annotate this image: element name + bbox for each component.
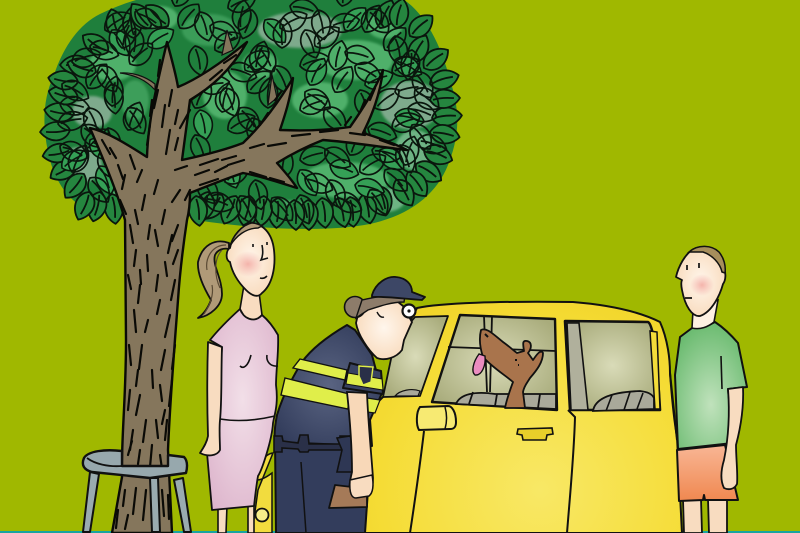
- seat ribs: [469, 392, 540, 408]
- tree canopy: [40, 0, 462, 230]
- ground strip: [0, 531, 800, 533]
- face features: [685, 263, 699, 298]
- trunk shape: [90, 42, 407, 533]
- stool ring: [83, 450, 187, 478]
- glasses: [402, 304, 416, 318]
- ear: [377, 312, 384, 317]
- door edges: [410, 373, 677, 533]
- stool ring inner edge: [87, 458, 122, 466]
- car body: [362, 302, 682, 533]
- dog tongue: [473, 354, 485, 375]
- stool legs: [83, 472, 191, 532]
- neck: [692, 300, 718, 329]
- left arm: [200, 342, 222, 455]
- car rear fender behind woman: [252, 453, 273, 533]
- police officer: [274, 277, 425, 533]
- face features: [253, 242, 268, 278]
- rim leaves: [40, 0, 462, 230]
- hair on head: [230, 223, 262, 246]
- window pillars: [448, 316, 556, 392]
- small twigs: [120, 30, 277, 105]
- green shirt: [675, 322, 747, 449]
- head: [356, 297, 412, 359]
- ponytail: [198, 241, 229, 318]
- dog: [473, 329, 543, 408]
- police cap: [372, 277, 425, 300]
- hair: [356, 295, 405, 318]
- man: [675, 246, 747, 533]
- dress waist and bust: [220, 355, 278, 420]
- rear pillar: [567, 323, 588, 410]
- reflective stripe top: [293, 359, 347, 380]
- hair: [689, 246, 725, 273]
- rear window: [565, 321, 660, 411]
- jacket: [275, 325, 382, 446]
- door handle: [517, 428, 553, 440]
- woman: [198, 223, 278, 533]
- canopy foliage mass: [44, 0, 457, 229]
- wheel nut: [256, 508, 268, 522]
- trousers: [275, 436, 372, 533]
- legs: [218, 504, 254, 533]
- sleeve badge: [359, 366, 373, 385]
- dress: [207, 309, 278, 510]
- inner outline leaves: [56, 0, 450, 227]
- yellow rear strip: [650, 331, 660, 409]
- belt: [274, 435, 353, 452]
- inner filled leaves: [57, 2, 427, 201]
- dashboard mound: [395, 390, 420, 396]
- window glass: [432, 315, 557, 410]
- legs: [683, 499, 727, 533]
- canopy light patches: [58, 6, 440, 220]
- cheek: [233, 251, 263, 277]
- head: [676, 248, 725, 316]
- dog body and snout: [480, 329, 543, 408]
- trouser crease: [301, 462, 306, 533]
- hair bun: [344, 296, 366, 318]
- cheek: [690, 274, 714, 296]
- bark texture: [102, 55, 394, 529]
- sleeve: [343, 363, 383, 394]
- reflective stripe bottom: [281, 378, 349, 409]
- car: [252, 302, 682, 533]
- arm: [721, 387, 743, 489]
- wing mirror: [417, 406, 456, 430]
- holster: [337, 436, 357, 472]
- head: [227, 223, 274, 296]
- sleeve stripe: [346, 373, 383, 390]
- dog eye and spots: [485, 334, 519, 365]
- windscreen: [383, 316, 448, 397]
- door window with dog: [432, 315, 557, 410]
- shorts: [677, 445, 738, 501]
- arm: [347, 392, 373, 498]
- tree trunk and branches: [90, 30, 407, 533]
- hand: [350, 475, 373, 498]
- rear window glass: [565, 321, 660, 410]
- neck: [240, 285, 262, 326]
- wallet: [329, 485, 367, 508]
- rear seat ribs: [606, 392, 643, 411]
- rear seat: [593, 391, 654, 411]
- tree stool guard: [83, 450, 191, 532]
- rear seat in window: [456, 393, 556, 409]
